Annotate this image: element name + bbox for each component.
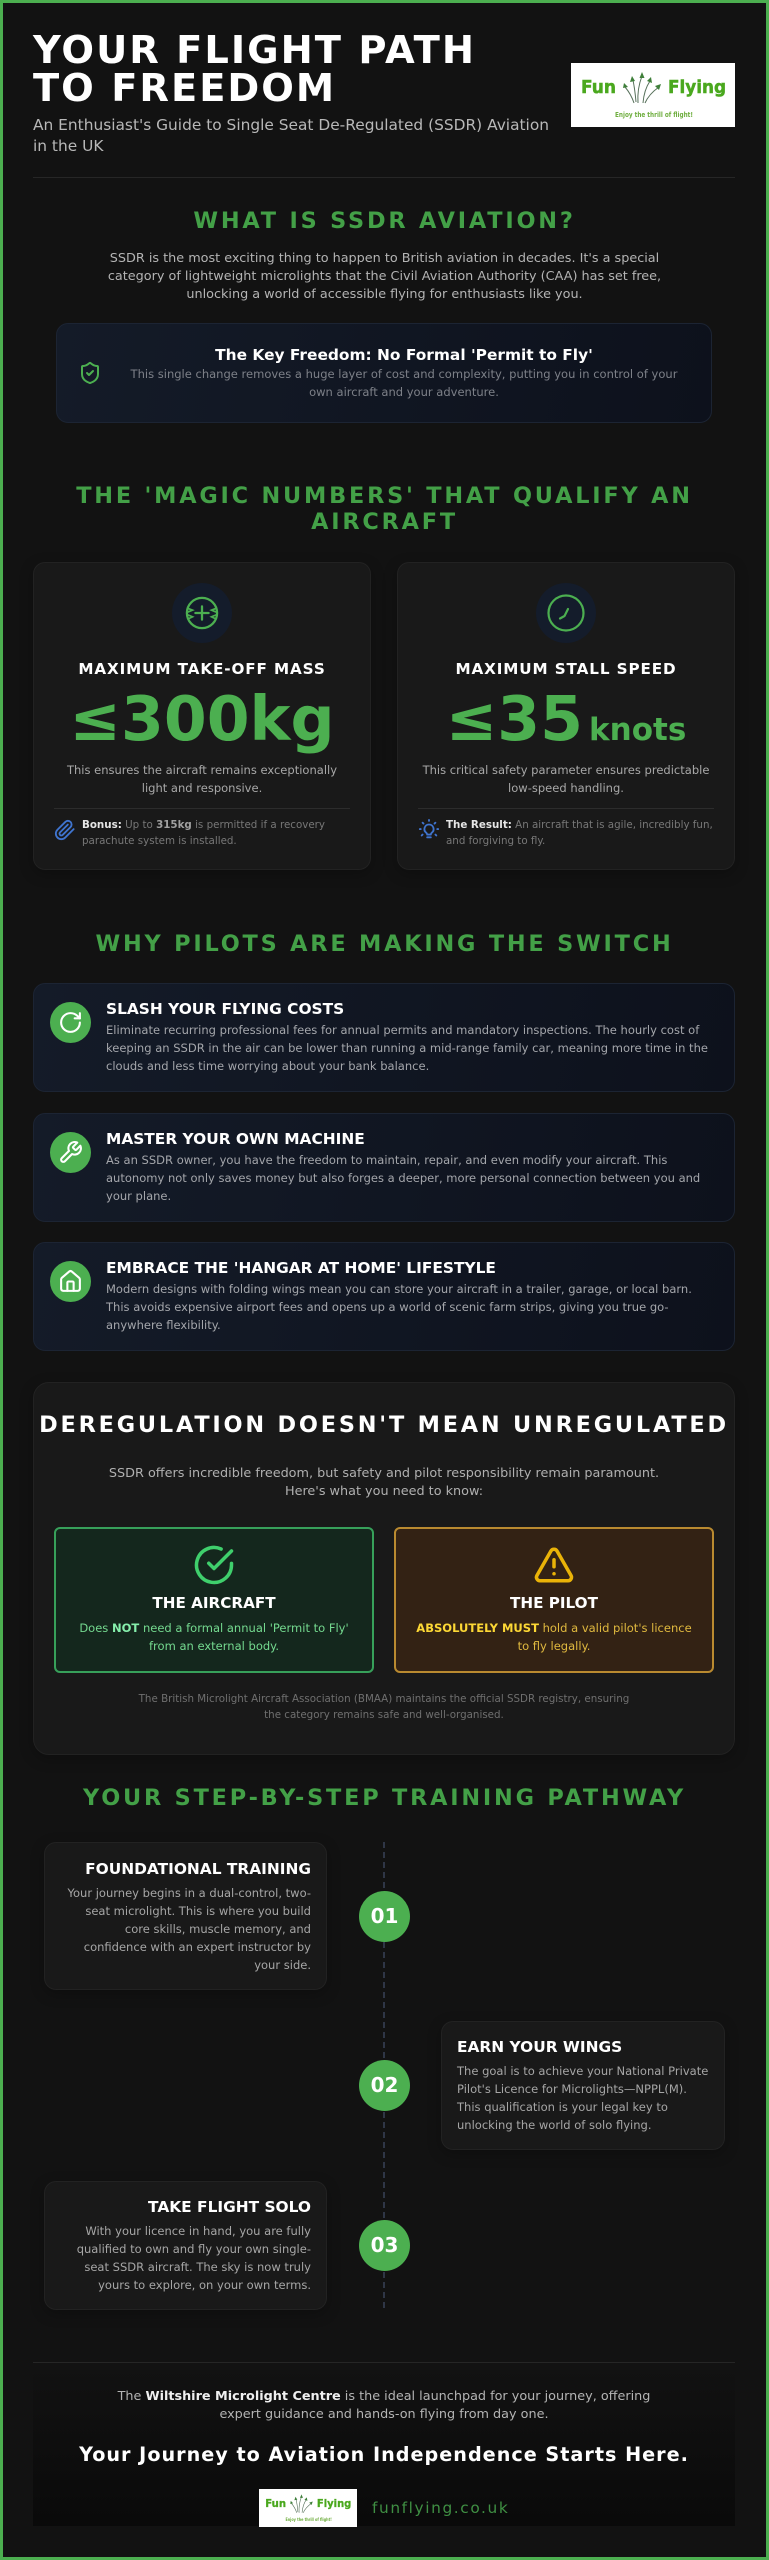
timeline line bbox=[383, 1842, 385, 2310]
bonus note: parachute system is installed. bbox=[82, 834, 237, 846]
registry note: the category remains safe and well-organised. bbox=[264, 1708, 504, 1720]
metric text: low-speed handling. bbox=[508, 781, 624, 795]
result note bbox=[446, 819, 713, 846]
benefit text: anywhere flexibility. bbox=[106, 1318, 221, 1332]
step text: Pilot's Licence for Microlights—NPPL(M). bbox=[457, 2082, 687, 2096]
key freedom text: This single change removes a huge layer of cost and complexity, putting you in control of your bbox=[131, 367, 677, 381]
result note: and forgiving to fly. bbox=[446, 834, 545, 846]
icon: weight gauge bbox=[172, 583, 232, 643]
heading: why pilots switch: WHY PILOTS ARE MAKING THE SWITCH bbox=[95, 931, 674, 957]
benefit text bbox=[106, 1282, 692, 1332]
metric value: ≤35knots bbox=[446, 683, 686, 755]
metric label: MAXIMUM STALL SPEED bbox=[455, 660, 677, 678]
title bbox=[32, 28, 476, 111]
step text: seat SSDR aircraft. The sky is now truly bbox=[84, 2260, 311, 2274]
logo: Fun Flying header bbox=[571, 63, 735, 127]
intro paragraph bbox=[108, 251, 661, 302]
panel: hangar at home bbox=[33, 1242, 735, 1351]
result note: The Result: An aircraft that is agile, incredibly fun, bbox=[446, 819, 713, 831]
panel: master your machine bbox=[33, 1113, 735, 1222]
box: the aircraft bbox=[54, 1527, 374, 1673]
step text: The goal is to achieve your National Private bbox=[457, 2064, 708, 2078]
logo: Fun Flying footer: Enjoy the thrill of flight! bbox=[285, 2517, 332, 2522]
step text: This qualification is your legal key to bbox=[457, 2100, 668, 2114]
intro paragraph: category of lightweight microlights that the Civil Aviation Authority (CAA) has set free, bbox=[108, 269, 661, 284]
icon: shield bbox=[81, 362, 99, 384]
benefit text bbox=[106, 1023, 708, 1073]
icon: speed gauge bbox=[536, 583, 596, 643]
step text: unlocking the world of solo flying. bbox=[457, 2118, 651, 2132]
metric text: This critical safety parameter ensures predictable bbox=[423, 763, 709, 777]
key freedom text bbox=[130, 367, 678, 399]
metric text bbox=[422, 763, 709, 795]
panel: maximum stall speed bbox=[397, 562, 735, 870]
box text: from an external body. bbox=[149, 1639, 279, 1653]
step 2 number: 02 bbox=[371, 2073, 398, 2097]
title: YOUR FLIGHT PATH bbox=[33, 28, 476, 73]
benefit text: keeping an SSDR in the air can be lower than running a mid-range family car, meaning more time in the bbox=[106, 1041, 708, 1055]
divider bbox=[418, 808, 714, 809]
subtitle: An Enthusiast's Guide to Single Seat De-Regulated (SSDR) Aviation bbox=[33, 116, 549, 134]
key freedom title: The Key Freedom: No Formal 'Permit to Fly' bbox=[215, 346, 593, 364]
step title: TAKE FLIGHT SOLO bbox=[148, 2198, 311, 2216]
icon: rotate bbox=[50, 1002, 91, 1043]
deregulation intro: Here's what you need to know: bbox=[285, 1484, 483, 1499]
metric value: ≤300kg bbox=[69, 683, 335, 755]
icon: lightbulb bbox=[418, 819, 440, 838]
benefit title: MASTER YOUR OWN MACHINE bbox=[106, 1130, 365, 1148]
key freedom text: own aircraft and your adventure. bbox=[309, 385, 499, 399]
benefit title: SLASH YOUR FLYING COSTS bbox=[106, 1000, 344, 1018]
benefit text: As an SSDR owner, you have the freedom to maintain, repair, and even modify your aircraft. This bbox=[106, 1153, 667, 1167]
logo: Fun Flying header: Enjoy the thrill of flight! bbox=[615, 111, 693, 119]
step text bbox=[67, 1886, 311, 1972]
call to action: Your Journey to Aviation Independence Starts Here. bbox=[79, 2443, 689, 2466]
logo: Fun Flying header: Fun bbox=[581, 77, 616, 98]
box title: THE AIRCRAFT bbox=[152, 1594, 276, 1612]
logo: Fun Flying header: Flying bbox=[668, 77, 726, 98]
icon: home bbox=[50, 1261, 91, 1302]
step text: seat microlight. This is where you build bbox=[85, 1904, 311, 1918]
footer text: expert guidance and hands-on flying from day one. bbox=[219, 2407, 549, 2422]
benefit text: This avoids expensive airport fees and opens up a world of scenic farm strips, giving you true go- bbox=[106, 1300, 669, 1314]
intro paragraph: SSDR is the most exciting thing to happen to British aviation in decades. It's a special bbox=[110, 251, 659, 266]
step text: yours to explore, on your own terms. bbox=[98, 2278, 311, 2292]
metric label: MAXIMUM TAKE-OFF MASS bbox=[78, 660, 326, 678]
benefit text: Eliminate recurring professional fees for annual permits and mandatory inspections. The hourly cost of bbox=[106, 1023, 699, 1037]
icon: warning bbox=[534, 1548, 574, 1582]
step title: EARN YOUR WINGS bbox=[457, 2038, 622, 2056]
box text: Does NOT need a formal annual 'Permit to Fly' bbox=[79, 1621, 349, 1635]
footer text: The Wiltshire Microlight Centre is the ideal launchpad for your journey, offering bbox=[118, 2389, 650, 2404]
heading: magic numbers: AIRCRAFT bbox=[311, 509, 458, 535]
box text bbox=[79, 1621, 349, 1653]
step text: qualified to own and fly your own single- bbox=[77, 2242, 311, 2256]
step 2 number bbox=[359, 2060, 410, 2111]
bonus note bbox=[82, 819, 325, 846]
panel: key freedom bbox=[56, 323, 712, 423]
step 1 number: 01 bbox=[371, 1904, 398, 1928]
bonus note: Bonus: Up to 315kg is permitted if a recovery bbox=[82, 819, 325, 831]
step text: your side. bbox=[254, 1958, 311, 1972]
icon: paperclip bbox=[54, 820, 75, 840]
step 1 number bbox=[359, 1891, 410, 1942]
benefit text bbox=[106, 1153, 700, 1203]
deregulation intro: SSDR offers incredible freedom, but safety and pilot responsibility remain paramount. bbox=[109, 1466, 659, 1481]
step 3 card bbox=[44, 2181, 327, 2310]
deregulation heading: DEREGULATION DOESN'T MEAN UNREGULATED bbox=[39, 1412, 729, 1438]
box text bbox=[416, 1621, 692, 1653]
step 3 number bbox=[359, 2220, 410, 2271]
metric text: This ensures the aircraft remains exceptionally bbox=[67, 763, 337, 777]
step title: FOUNDATIONAL TRAINING bbox=[85, 1860, 311, 1878]
benefit text: clouds and less time worrying about your bank balance. bbox=[106, 1059, 429, 1073]
step 3 number: 03 bbox=[371, 2233, 398, 2257]
deregulation intro bbox=[109, 1466, 659, 1499]
panel: slash costs bbox=[33, 983, 735, 1092]
logo: Fun Flying footer bbox=[259, 2489, 357, 2527]
box text: to fly legally. bbox=[518, 1639, 590, 1653]
icon: check circle bbox=[194, 1546, 234, 1584]
heading: training pathway: YOUR STEP-BY-STEP TRAINING PATHWAY bbox=[83, 1785, 686, 1811]
header divider bbox=[33, 177, 735, 178]
benefit text: autonomy not only saves money but also forges a deeper, more personal connection between you and bbox=[106, 1171, 700, 1185]
title: TO FREEDOM bbox=[33, 66, 336, 111]
heading: magic numbers: THE 'MAGIC NUMBERS' THAT QUALIFY AN bbox=[76, 483, 693, 509]
panel: deregulation bbox=[33, 1382, 735, 1755]
subtitle: in the UK bbox=[33, 136, 103, 154]
icon: wrench bbox=[50, 1132, 91, 1173]
metric text bbox=[66, 763, 337, 795]
step text bbox=[456, 2064, 708, 2132]
box text: ABSOLUTELY MUST hold a valid pilot's licence bbox=[416, 1621, 692, 1635]
benefit text: Modern designs with folding wings mean you can store your aircraft in a trailer, garage, or local barn. bbox=[106, 1282, 692, 1296]
website: funflying.co.uk bbox=[372, 2499, 509, 2517]
subtitle bbox=[33, 116, 549, 154]
step text: With your licence in hand, you are fully bbox=[85, 2224, 311, 2238]
step text bbox=[77, 2224, 311, 2292]
step text: Your journey begins in a dual-control, two- bbox=[67, 1886, 311, 1900]
footer text bbox=[118, 2389, 650, 2422]
step text: confidence with an expert instructor by bbox=[84, 1940, 311, 1954]
step 1 card bbox=[44, 1842, 327, 1990]
panel: footer bbox=[33, 2362, 735, 2526]
box: the pilot bbox=[394, 1527, 714, 1673]
registry note: The British Microlight Aircraft Association (BMAA) maintains the official SSDR registry, ensuring bbox=[139, 1693, 629, 1705]
registry note bbox=[138, 1693, 629, 1720]
step text: core skills, muscle memory, and bbox=[125, 1922, 311, 1936]
benefit text: your plane. bbox=[106, 1189, 171, 1203]
panel: maximum take-off mass bbox=[33, 562, 371, 870]
heading: what is SSDR: WHAT IS SSDR AVIATION? bbox=[193, 208, 576, 234]
step 2 card bbox=[441, 2021, 725, 2150]
logo: Fun Flying footer: Flying bbox=[317, 2497, 351, 2510]
metric text: light and responsive. bbox=[142, 781, 262, 795]
intro paragraph: unlocking a world of accessible flying for enthusiasts like you. bbox=[186, 287, 583, 302]
benefit title: EMBRACE THE 'HANGAR AT HOME' LIFESTYLE bbox=[106, 1259, 496, 1277]
divider bbox=[54, 808, 350, 809]
heading: magic numbers bbox=[76, 483, 693, 535]
box title: THE PILOT bbox=[510, 1594, 598, 1612]
logo: Fun Flying footer: Fun bbox=[265, 2497, 286, 2510]
